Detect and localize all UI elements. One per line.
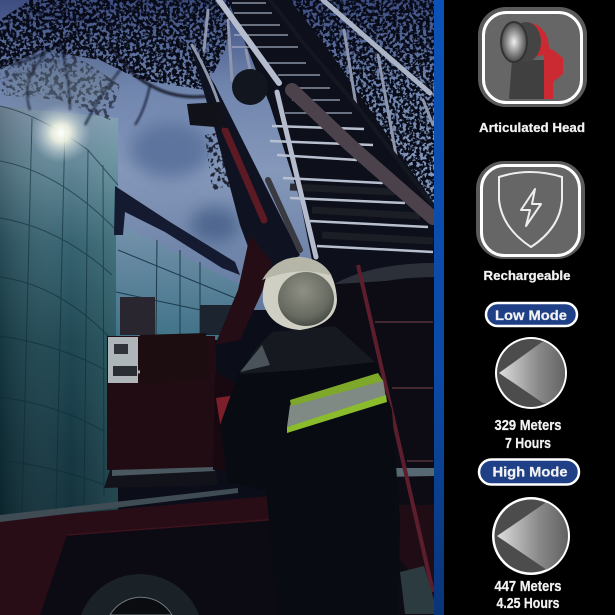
text: low mode range and runtime: 329 Meters (494, 417, 562, 434)
truck: upper compartment (104, 336, 240, 488)
ladder: dark ball fitting (232, 69, 268, 105)
firefighter (220, 257, 400, 558)
text: high mode range and runtime: 4.25 Hours (496, 595, 560, 612)
ladder: truss and rails (192, 0, 433, 257)
blue divider strip (434, 0, 444, 615)
icon: low mode beam (495, 337, 570, 409)
badge: Low Mode (486, 303, 577, 326)
text: low mode range and runtime: 7 Hours (505, 435, 551, 452)
collar (240, 326, 375, 374)
right panel background (444, 0, 615, 615)
building: curved glass tower (0, 106, 118, 530)
ladder: dark bracket (187, 102, 228, 128)
red mast below ladder (215, 235, 272, 345)
label: Rechargeable: Rechargeable (484, 268, 570, 283)
reflective stripe (287, 373, 387, 433)
truck: control panel (108, 333, 209, 385)
truck: body (0, 468, 434, 615)
jacket (220, 384, 400, 558)
badge: Low Mode: Low Mode (495, 307, 567, 323)
truck: red glove (216, 396, 230, 425)
lower right shadow area (334, 281, 434, 310)
red side ladder (358, 265, 433, 592)
badge: High Mode: High Mode (492, 464, 568, 480)
floodlight glow (34, 106, 88, 162)
panel: photo of firefighter at ladder truck (0, 0, 435, 615)
icon: articulated head flashlight (478, 7, 587, 107)
tree foliage and branches (0, 0, 435, 215)
ladder: dark underside (190, 0, 435, 300)
building: second block with burnt roof (114, 186, 240, 340)
text: high mode range and runtime: 447 Meters (494, 578, 562, 595)
label: Articulated Head: Articulated Head (479, 120, 585, 135)
helmet (262, 257, 337, 330)
icon: rechargeable shield (476, 161, 585, 259)
truck tyre patch (400, 566, 434, 614)
icon: high mode beam (492, 497, 572, 575)
text: high mode range and runtime (494, 578, 562, 612)
ladder: rungs (232, 3, 433, 252)
hose (338, 270, 434, 290)
sky and smoke (0, 0, 435, 310)
truck: wheel (81, 574, 199, 615)
badge: High Mode (479, 460, 579, 484)
text: low mode range and runtime (494, 417, 562, 452)
